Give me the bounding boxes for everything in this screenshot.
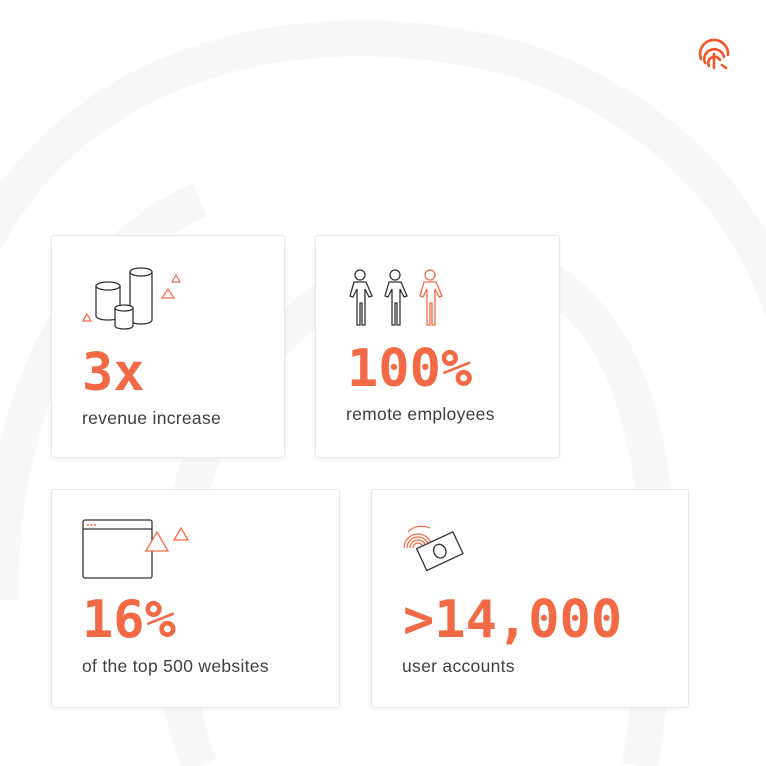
- number: >14,000: >14,000: [403, 590, 622, 650]
- panel: remote: [315, 235, 560, 458]
- logo: fingerprint: [698, 38, 730, 70]
- label: user accounts: [402, 656, 515, 676]
- label: revenue increase: [82, 408, 221, 428]
- panel: revenue: [51, 235, 285, 458]
- label: remote employees: [346, 404, 495, 424]
- icon: fingerprint and banknote: [403, 526, 464, 572]
- icon: cylinders: [82, 267, 181, 330]
- icon: browser with warnings: [82, 519, 189, 579]
- icon: people: [349, 269, 443, 326]
- label: of the top 500 websites: [82, 656, 269, 676]
- panel: accounts: [371, 489, 689, 708]
- panel: websites: [51, 489, 340, 708]
- number: 16%: 16%: [82, 590, 176, 650]
- number: 3x: 3x: [82, 343, 145, 403]
- number: 100%: 100%: [347, 339, 472, 399]
